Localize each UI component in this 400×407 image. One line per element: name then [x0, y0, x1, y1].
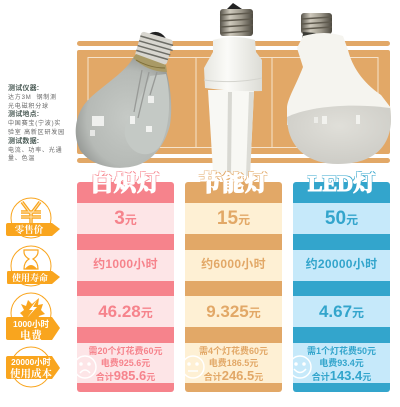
price cell: [185, 203, 282, 234]
values: energy saving: [199, 208, 268, 383]
electricity cell: [185, 296, 282, 327]
electricity cell: [77, 296, 174, 327]
test info text block: 达方3M 钢制测: [8, 95, 57, 101]
total detail: 电费925.6元: [101, 358, 150, 368]
panel: LED column: [293, 182, 390, 392]
total cost cell: [77, 343, 174, 383]
electricity: 9.325元: [206, 302, 261, 321]
lifespan: 约6000小时: [201, 257, 266, 271]
test info text block: 量、色温: [8, 156, 35, 162]
electricity cell: [293, 296, 390, 327]
test info text block: 测试数据:: [8, 138, 39, 145]
panel: incandescent column: [77, 182, 174, 392]
total detail: 需1个灯花费50元: [307, 346, 376, 356]
total detail: 电费93.4元: [319, 358, 364, 368]
total cost cell: [293, 343, 390, 383]
electricity: 4.67元: [319, 302, 364, 321]
price: 3元: [114, 208, 137, 229]
tan court panel: [77, 41, 390, 163]
icon: incandescent bulb: [76, 28, 176, 168]
total detail: 需20个灯花费60元: [88, 346, 163, 356]
icon: neutral face: [182, 356, 204, 378]
heading: incandescent: 白炽灯: [91, 171, 160, 196]
total detail: [88, 346, 163, 383]
total detail: 合计143.4元: [312, 368, 371, 383]
icon: electricity fee badge: 电费: [20, 328, 43, 342]
panel: energy saving column: [185, 182, 282, 392]
icon: electricity fee badge: [6, 293, 60, 342]
test info text block: 测试仪器:: [8, 85, 39, 92]
price: 15元: [217, 208, 250, 229]
lifespan: 约1000小时: [93, 257, 158, 271]
icon: lifespan badge: [7, 246, 60, 286]
price: 50元: [325, 208, 358, 229]
total detail: 合计985.6元: [96, 368, 155, 383]
test info text block: 验室 高新区研发园: [8, 130, 65, 136]
values: incandescent: [88, 208, 163, 383]
icon: retail price badge: 零售价: [15, 224, 44, 236]
test info text block: 中国赛宝(宁波)实: [8, 121, 61, 127]
icon: retail price badge: [6, 198, 60, 238]
tan background court with bulbs: [76, 3, 391, 176]
row icons and faces: [6, 198, 312, 388]
icon: total cost badge: 20000小时: [11, 357, 52, 367]
lifespan: 约20000小时: [306, 257, 377, 271]
test info text block: 测试地点:: [8, 111, 39, 118]
lifespan cell: [77, 250, 174, 281]
total detail: [307, 346, 376, 383]
values: LED: [306, 208, 377, 383]
lifespan cell: [293, 250, 390, 281]
icon: energy saving bulb: [204, 3, 262, 176]
icon: sad face: [74, 356, 96, 378]
total detail: [199, 346, 268, 383]
electricity: 46.28元: [98, 302, 153, 321]
icon: electricity fee badge: 1000小时: [13, 319, 49, 329]
heading: LED: LED灯: [308, 171, 375, 196]
heading: energy saving: 节能灯: [199, 171, 268, 196]
total detail: 合计246.5元: [204, 368, 263, 383]
price cell: [77, 203, 174, 234]
test info text block: 电流、功率、光通: [8, 148, 62, 154]
price cell: [293, 203, 390, 234]
icon: total cost badge: 使用成本: [10, 367, 52, 380]
icon: happy face: [289, 356, 311, 378]
lifespan cell: [185, 250, 282, 281]
icon: total cost badge: [6, 347, 60, 387]
total detail: 需4个灯花费60元: [199, 346, 268, 356]
icon: LED bulb: [287, 13, 391, 164]
test info text block: 光电磁积分球: [8, 104, 49, 110]
icon: lifespan badge: 使用寿命: [12, 272, 48, 283]
test info text block: [8, 84, 65, 162]
total detail: 电费186.5元: [209, 358, 258, 368]
total cost cell: [185, 343, 282, 383]
